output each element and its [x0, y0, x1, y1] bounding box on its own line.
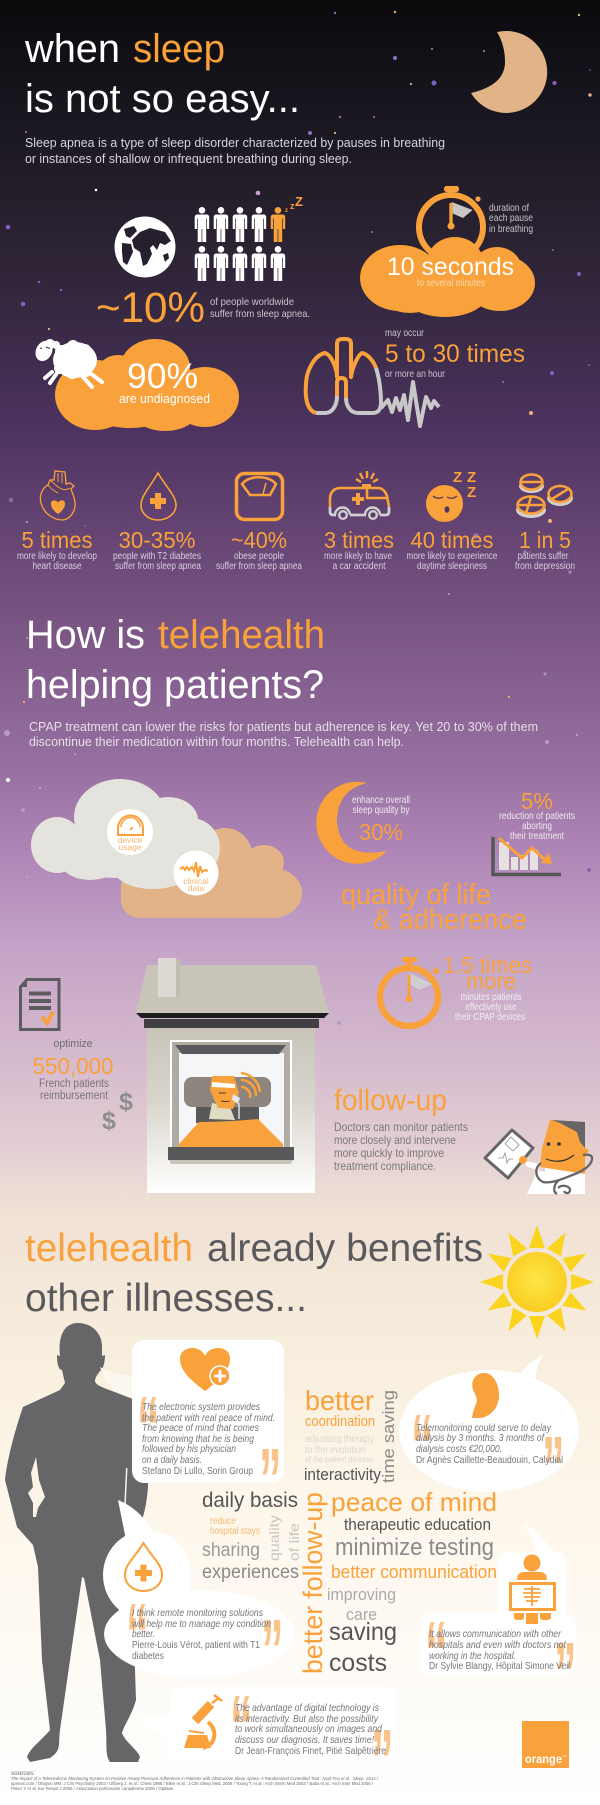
intro paragraph: or instances of shallow or infrequent breathing during sleep.: [25, 151, 352, 166]
risk: depression: patients suffer: [518, 551, 569, 562]
quote bubble: microscope: The advantage of digital technology is: [235, 1702, 380, 1714]
clinical data badge: clinical: [183, 876, 209, 886]
intro paragraph: Sleep apnea is a type of sleep disorder characterized by pauses in breathing: [25, 135, 445, 150]
icon: lungs and breath trace: [306, 339, 439, 426]
icon: dollar signs: $: [102, 1107, 116, 1135]
quote bubble: microscope: discuss our diagnosis. It saves time!: [235, 1734, 374, 1746]
quote bubble: x-ray: hospitals and even with doctors not: [429, 1639, 567, 1651]
quote bubble: heart: ”: [259, 1431, 282, 1531]
heading: telehealth already benefits other illnesses: [25, 1227, 483, 1320]
icon: row of people: Z: [295, 194, 303, 209]
cloud: [55, 339, 239, 431]
quote bubble: microscope: its interactivity. But also the possibility: [235, 1713, 379, 1725]
risks row: [17, 469, 575, 572]
quote bubble: microscope: [138, 1678, 396, 1805]
stat: 10 seconds: [360, 186, 535, 317]
number: 10 seconds: [387, 253, 514, 281]
caption: suffer from sleep apnea.: [210, 308, 310, 320]
quote bubble: kidney: [399, 1355, 579, 1519]
risk: diabetes: suffer from sleep apnea: [115, 561, 201, 572]
quote bubble: kidney: dialysis by 3 months. 3 months of: [416, 1432, 545, 1444]
stat: sleep quality 30%: enhance overall: [352, 795, 410, 806]
paragraph: CPAP treatment: CPAP treatment can lower the risks for patients but adherence is key. Yet 20 to 30% of them: [29, 719, 538, 734]
heading: how is telehealth helping patients: How is: [26, 613, 145, 657]
quote bubble: microscope: “: [230, 1678, 253, 1778]
icon: heart with plus: [180, 1348, 230, 1391]
quote bubble: heart: “: [137, 1379, 160, 1479]
risk: car accident: a car accident: [332, 561, 386, 572]
icon: pills: [516, 474, 573, 518]
risk: sleepiness: daytime sleepiness: [417, 561, 487, 572]
eave: [136, 1013, 329, 1028]
intro paragraph: [25, 135, 445, 166]
caption: [210, 296, 310, 320]
icon: ambulance: [330, 471, 389, 519]
icon: sleepy face: Z: [453, 469, 462, 486]
icon: globe: [114, 216, 176, 278]
quote bubble: x-ray: It allows communication with other: [429, 1628, 561, 1640]
window with patient in bed: [168, 1040, 294, 1164]
word cloud: quality: [266, 1515, 282, 1561]
logo: orange: [522, 1721, 569, 1768]
word cloud: therapeutic education: [344, 1515, 491, 1534]
heading: quality of life and adherence: & adherence: [373, 904, 527, 936]
heading: telehealth already benefits other illnesses: telehealth: [25, 1227, 193, 1270]
stat: 1.5 times more: [380, 952, 532, 1026]
stat: 10% of people: [96, 194, 310, 332]
sub caption: to several minutes: [417, 278, 485, 289]
follow-up text: more closely and intervene: [334, 1133, 456, 1147]
paragraph: CPAP treatment: [29, 719, 538, 749]
quote bubble: heart: from knowing that he is being: [142, 1433, 254, 1445]
heading: quality of life and adherence: [341, 879, 527, 936]
stat: sleep quality 30%: sleep quality by: [352, 805, 410, 816]
caption above: may occur: [385, 327, 424, 339]
icon: sun: [480, 1225, 594, 1339]
risk: obesity: suffer from sleep apnea: [216, 561, 302, 572]
risk: heart disease: [17, 471, 97, 572]
stat: 5% reduction: aborting: [522, 821, 552, 832]
icon: heart: [40, 471, 75, 520]
word cloud: of the patient disease: [305, 1455, 373, 1464]
risk: sleepiness: more likely to experience: [406, 551, 498, 562]
risk: obesity: obese people: [234, 551, 284, 562]
icon: stopwatch: [380, 957, 439, 1026]
quote bubble: drop: better.: [132, 1628, 155, 1640]
word cloud: [202, 1385, 497, 1677]
silhouette of a man: [5, 1323, 148, 1762]
caption: of people worldwide: [210, 296, 294, 308]
quote bubble: drop: ”: [261, 1602, 284, 1702]
quote bubble: drop: [103, 1500, 294, 1702]
risk: diabetes: [113, 473, 201, 572]
follow-up text: treatment compliance.: [334, 1159, 436, 1173]
quote bubble: kidney: dialysis costs €20,000.: [416, 1443, 502, 1455]
roof: [136, 965, 329, 1013]
word cloud: saving: [329, 1618, 397, 1646]
tan cloud: [121, 828, 302, 918]
word cloud: better: [305, 1385, 374, 1416]
icon: sleepy face: [426, 469, 476, 522]
stat: 5% reduction: [493, 788, 575, 874]
risk: depression: 1 in 5: [519, 527, 571, 553]
risk: diabetes: 30-35%: [118, 527, 196, 553]
wall: [147, 1028, 315, 1193]
sources: Peker Y et al. Eur Respir J 2006 / Association pulmonaire canadienne 2006 / Optisas: [11, 1786, 174, 1791]
word cloud: care: [346, 1605, 377, 1624]
word cloud: hospital stays: [210, 1526, 260, 1537]
quote bubble: x-ray: working in the hospital.: [429, 1650, 516, 1662]
stat: 5% reduction: 5%: [521, 788, 553, 814]
quote bubble: heart: the patient with real peace of mind.: [142, 1412, 275, 1424]
heading: how is telehealth helping patients: telehealth: [158, 613, 325, 657]
word cloud: costs: [329, 1649, 387, 1677]
icon: moon: [471, 31, 547, 113]
word cloud: time saving: [379, 1390, 398, 1483]
house with patient: [136, 958, 329, 1193]
quote bubble: heart: on a daily basis.: [142, 1454, 202, 1466]
quote bubble: drop: “: [126, 1586, 149, 1686]
icon: stopwatch: [419, 186, 483, 259]
cloud: [360, 237, 535, 317]
quote bubble: drop: will help me to manage my condition: [132, 1618, 271, 1630]
number: 5 to 30 times: [385, 340, 525, 368]
icon: row of people: z: [290, 201, 295, 211]
stat: 1.5 times more: minutes patients: [460, 992, 522, 1003]
heading: telehealth already benefits other illnesses: other illnesses...: [25, 1277, 307, 1320]
follow-up text: follow-up: [334, 1084, 447, 1117]
risk: car accident: 3 times: [324, 527, 394, 553]
icon: orange crescent: [316, 782, 387, 864]
stat: sleep quality 30%: [316, 782, 410, 864]
stat: 1.5 times more: more: [466, 968, 516, 994]
risk: car accident: [324, 471, 394, 572]
risk: sleepiness: 40 times: [410, 527, 494, 553]
number: 90%: [127, 357, 198, 396]
caption: in breathing: [489, 223, 533, 235]
stat: 1.5 times more: 1.5 times: [443, 952, 532, 978]
quote bubble: x-ray: Dr Sylvie Blangy, Hôpital Simone Veil: [429, 1660, 570, 1672]
word cloud: to the evolution: [305, 1444, 366, 1456]
quote bubble: x-ray: ”: [554, 1625, 577, 1725]
icon: drop with plus: [125, 1543, 162, 1591]
word cloud: interactivity: [304, 1465, 381, 1484]
stat: 550,000 patients: 550,000: [32, 1053, 114, 1079]
icon: doctor with tablet: [485, 1120, 592, 1194]
heading: how is telehealth helping patients: [26, 613, 325, 707]
icon: document with tick: [19, 978, 59, 1030]
quote bubble: heart: The electronic system provides: [142, 1401, 261, 1413]
stat: 550,000 patients: [19, 978, 133, 1135]
title: when sleep is not so easy: sleep: [133, 27, 225, 71]
caption: are undiagnosed: [119, 391, 210, 406]
quote bubble: heart: followed by his physician: [142, 1443, 236, 1455]
icon: falling bar chart: [493, 837, 561, 874]
word cloud: improving: [327, 1585, 396, 1604]
risk: obesity: [216, 474, 302, 572]
logo: orange: orange: [525, 1752, 562, 1766]
quote bubble: microscope: to work simultaneously on images and: [235, 1723, 383, 1735]
quote bubble: drop: Pierre-Louis Vérot, patient with T1: [132, 1639, 260, 1651]
stat: 550,000 patients: reimbursement: [40, 1090, 109, 1102]
sources: apneos.com / Ohayon MM: J Clin Psychiatry 2003 / Ulfberg J. et al.: Chest 1996 / Ellen et al.: J Clin Sleep Med. 2006 / Young T, et al.: Arch Intern Med 2002 / Babu et al.: Arch Inter Med 2005 /: [11, 1781, 374, 1786]
quote bubble: microscope: Dr Jean-François Finet, Pitié Salpêtrière: [235, 1745, 386, 1757]
quote bubble: x-ray: [420, 1523, 577, 1725]
risk: depression: from depression: [515, 561, 575, 572]
risk: depression: [515, 474, 575, 572]
word cloud: better communication: [331, 1562, 497, 1582]
icon: row of people: z: [285, 208, 288, 214]
quote bubble: heart: Stefano Di Lullo, Sorin Group: [142, 1465, 253, 1477]
word cloud: coordination: [305, 1414, 375, 1430]
big number: ~10%: [96, 284, 205, 332]
quote bubble: kidney: Telemonitoring could serve to delay: [416, 1422, 552, 1434]
word cloud: better follow-up: [298, 1492, 328, 1674]
clouds: device usage and clinical data: [31, 779, 302, 918]
icon: microscope: [184, 1695, 222, 1748]
stat: 1.5 times more: effectively use: [466, 1002, 517, 1013]
word cloud: minimize testing: [335, 1534, 494, 1561]
heading: how is telehealth helping patients: helping patients?: [26, 663, 324, 707]
follow-up text: more quickly to improve: [334, 1146, 444, 1160]
sources: [11, 1771, 379, 1791]
sources: sources:: [11, 1771, 35, 1777]
stat: 90% undiagnosed: [32, 338, 239, 431]
logo: orange: TM: [562, 1754, 567, 1758]
icon: kidney: [472, 1373, 499, 1418]
icon: dollar signs: [102, 1088, 133, 1135]
caption below: or more an hour: [385, 368, 445, 380]
follow-up text: [334, 1084, 468, 1173]
sources: The Impact of a Telemedicine Monitoring System on Positive Airway Pressure Adherence in Patients with Obstructive Sleep Apnea: A Randomized Controlled Trial : Nurit Fox et al.: Sleep. 2012 /: [11, 1776, 379, 1781]
title: when sleep is not so easy: [24, 27, 300, 121]
clinical data badge: data: [188, 883, 205, 893]
title: when sleep is not so easy: is not so easy...: [25, 77, 300, 121]
device usage badge: [107, 809, 153, 855]
word cloud: experiences: [202, 1562, 299, 1583]
device usage badge: device: [118, 835, 143, 845]
stars: [4, 11, 594, 1025]
icon: bathroom scale: [236, 474, 282, 520]
word cloud: sharing: [202, 1540, 260, 1561]
title: when sleep is not so easy: when: [24, 27, 120, 71]
chimney: [158, 958, 180, 997]
quote bubble: kidney: “: [411, 1397, 434, 1497]
quote bubble: kidney: Dr Agnès Caillette-Beaudouin, Calydial: [416, 1454, 563, 1466]
heading: quality of life and adherence: quality of life: [341, 879, 491, 911]
stat: 1.5 times more: their CPAP devices: [455, 1012, 525, 1023]
risk: diabetes: people with T2 diabetes: [113, 551, 201, 562]
risk: sleepiness: [406, 469, 498, 572]
stat: sleep quality 30%: 30%: [359, 819, 403, 845]
device usage badge: usage: [118, 842, 142, 852]
grey cloud: [31, 779, 220, 889]
quote bubble: heart: [100, 1340, 284, 1531]
risk: heart disease: heart disease: [32, 561, 82, 572]
quote bubble: kidney: ”: [542, 1419, 565, 1519]
quote bubble: drop: diabetes: [132, 1650, 164, 1662]
word cloud: of life: [286, 1523, 302, 1561]
icon: sleepy face: Z: [467, 484, 476, 501]
risk: heart disease: more likely to develop: [17, 551, 97, 562]
quote bubble: heart: The peace of mind that comes: [142, 1422, 260, 1434]
risk: car accident: more likely to have: [324, 551, 392, 562]
stat: 550,000 patients: French patients: [39, 1078, 109, 1090]
clinical data badge: [174, 850, 218, 896]
word cloud: daily basis: [202, 1489, 298, 1512]
icon: sleepy face: Z: [467, 469, 476, 486]
icon: sheep: [32, 338, 102, 387]
stat: 5% reduction: their treatment: [510, 831, 564, 842]
stat: 550,000 patients: optimize: [54, 1038, 92, 1050]
word cloud: peace of mind: [331, 1487, 497, 1517]
word cloud: reduce: [210, 1516, 236, 1527]
stat: 5% reduction: reduction of patients: [499, 811, 575, 822]
caption: each pause: [489, 212, 533, 224]
follow-up text: Doctors can monitor patients: [334, 1120, 468, 1134]
risk: obesity: ~40%: [231, 527, 287, 553]
icon: dollar signs: $: [119, 1088, 133, 1116]
heading: telehealth already benefits other illnesses: already benefits: [207, 1227, 483, 1270]
quote bubble: drop: I think remote monitoring solutions: [132, 1607, 264, 1619]
risk: heart disease: 5 times: [22, 527, 92, 553]
quote bubble: x-ray: “: [425, 1604, 448, 1704]
paragraph: CPAP treatment: discontinue their medication within four months. Telehealth can help.: [29, 734, 404, 749]
icon: drop with plus: [141, 473, 176, 520]
word cloud: adjusting therapy: [305, 1433, 375, 1445]
icon: x-ray: [510, 1554, 554, 1624]
caption: duration of: [489, 202, 529, 214]
stat: 5 to 30 times: [306, 327, 525, 426]
caption: [489, 202, 533, 235]
icon: row of people: [195, 194, 303, 281]
